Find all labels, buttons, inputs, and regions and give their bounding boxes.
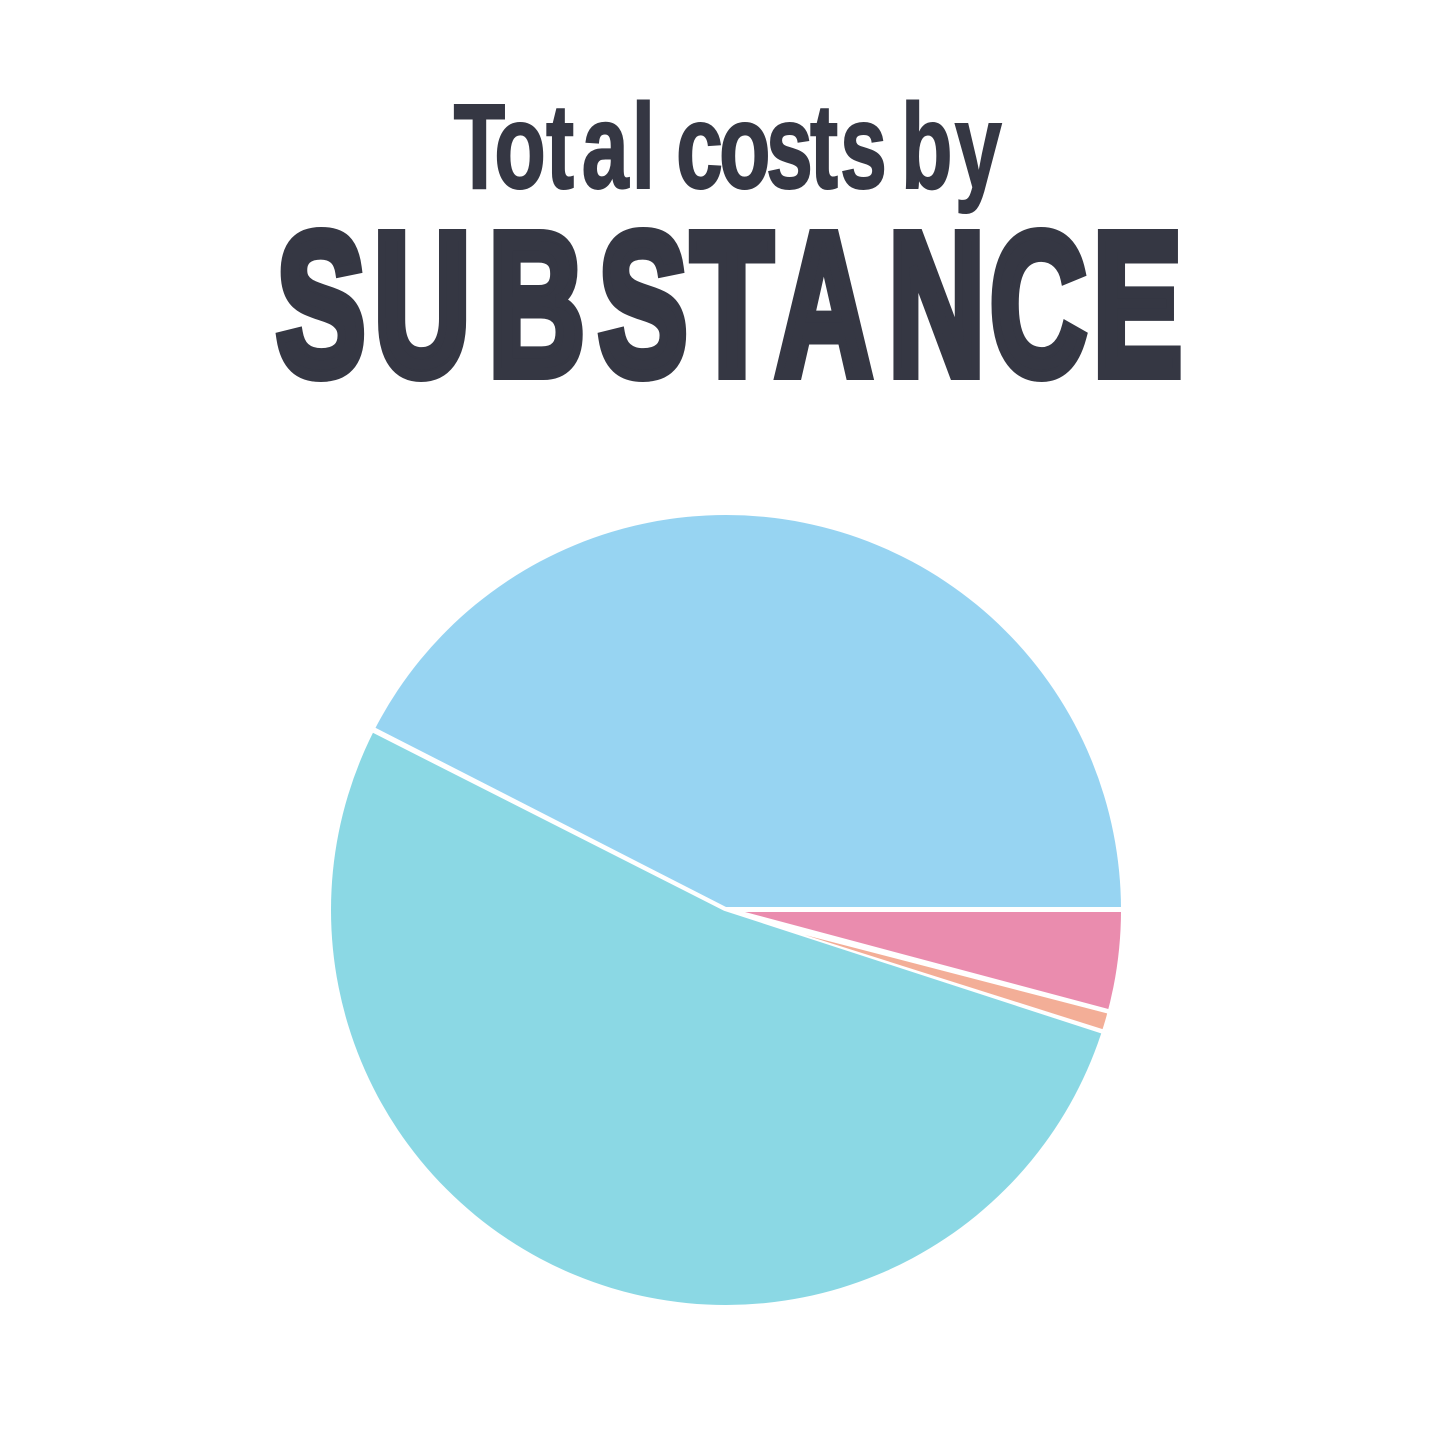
title: line two: SUBSTANCE [276,192,1182,418]
slice: orange [806,935,1108,1029]
pie chart: total costs by substance [331,515,1121,1305]
slice: pink [745,912,1121,1009]
slice: teal [331,732,1102,1305]
title: line one: Total costs by [454,80,1002,215]
slice: blue [376,515,1121,907]
